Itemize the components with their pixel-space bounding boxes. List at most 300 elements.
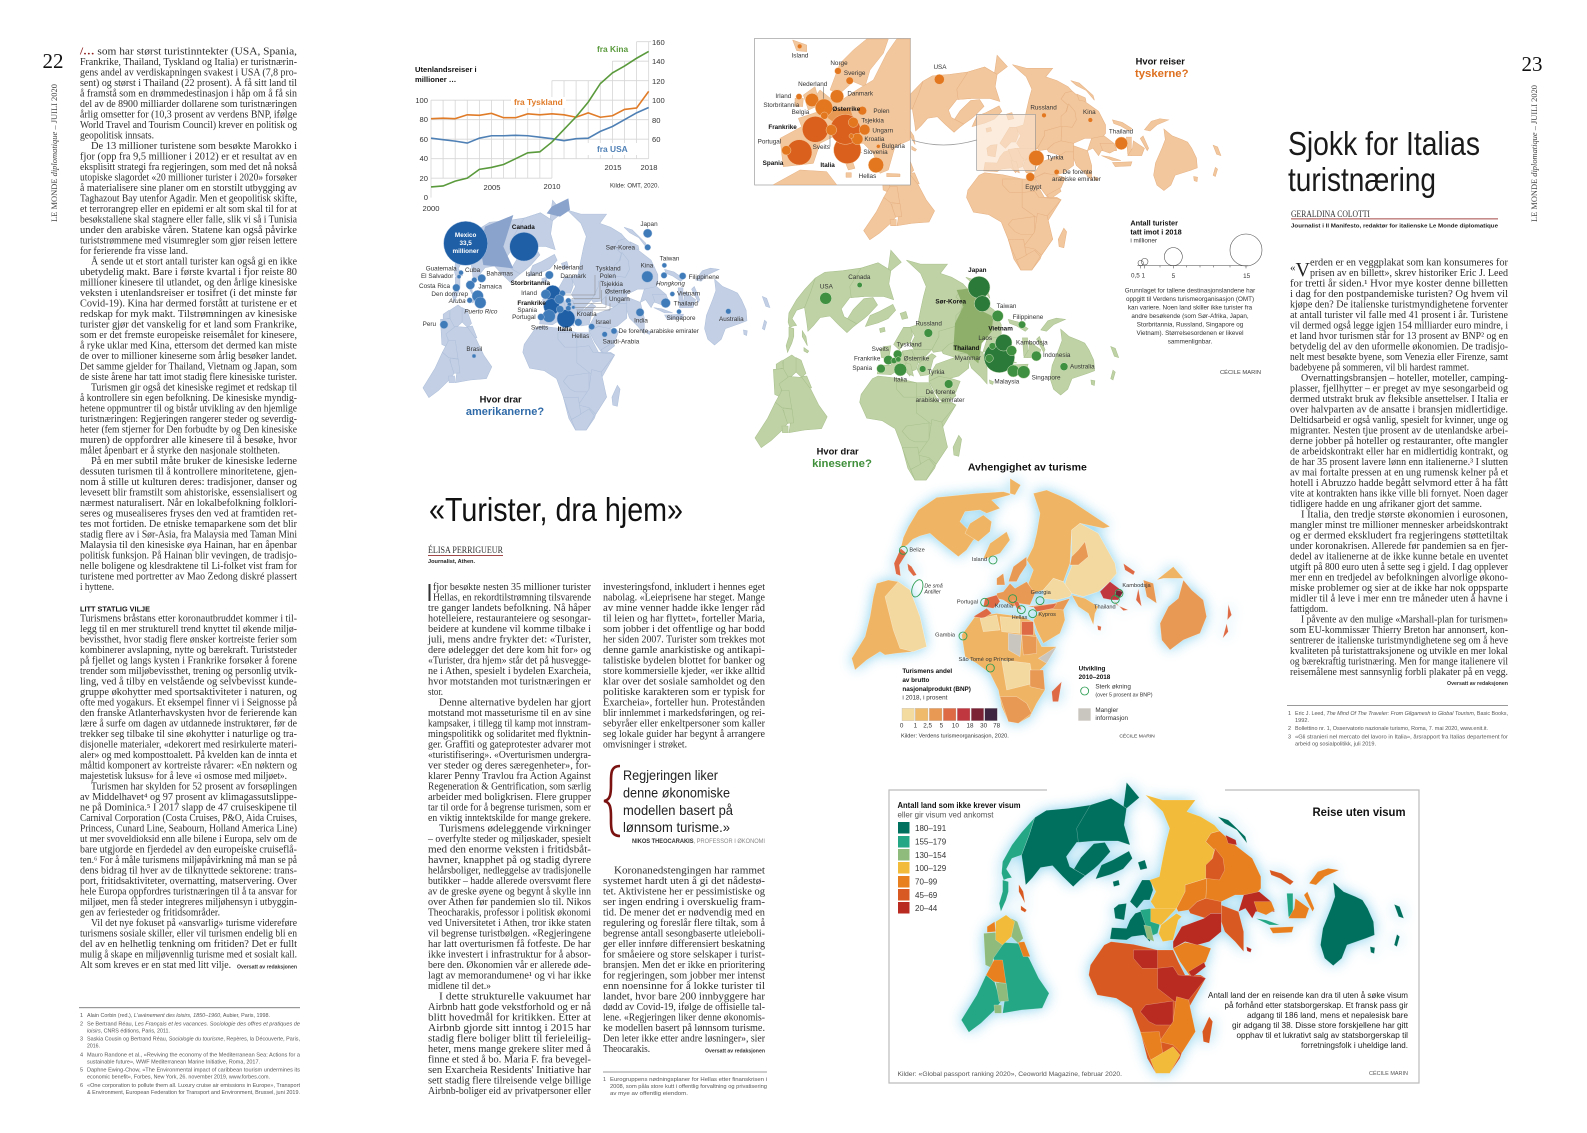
- axis labels: 160: [652, 38, 665, 47]
- quote text: modellen basert på: [623, 802, 733, 818]
- text column right: badebyene på sommeren, vil bli hardest rammet.: [1290, 362, 1469, 374]
- footnote middle: 1: [603, 1077, 606, 1083]
- text column 2: tar til orde for å begrense turismen, som er: [428, 802, 592, 814]
- connector curve: [912, 140, 977, 145]
- text column right: prisen av en billett», skrev historiker Eric J. Leed: [1310, 268, 1508, 279]
- country labels blue: Japan: [640, 221, 658, 228]
- text column 2: stor.: [428, 687, 443, 698]
- legend note: oppgitt til Verdens turismeorganisasjon (OMT): [1126, 296, 1254, 303]
- text column 1: main article continuation: utopiske slagordet «20 millioner turister i 2020» forsøker: [80, 172, 298, 184]
- country labels dependence: Kroatia: [995, 604, 1014, 610]
- legend visa: 20–44: [915, 904, 938, 913]
- country labels green: Canada: [848, 274, 871, 281]
- country labels orange: [758, 52, 1134, 191]
- series labels: fra USA: [597, 144, 628, 154]
- text column 2: – overfylte steder og miljøskader, spesielt: [427, 834, 591, 845]
- text column right: Overnattingsbransjen – hoteller, moteller, camping-: [1301, 373, 1508, 384]
- footnotes right: 3: [1288, 734, 1291, 740]
- text column 2: motstand mot masseturisme til en av sine: [428, 708, 592, 719]
- country labels blue: Singapore: [667, 315, 696, 322]
- legend visa: Antall land som ikke krever visum: [898, 801, 1020, 810]
- text column 1: main article continuation: å framstå som en drømmedestinasjon i håp om å få sin: [80, 88, 297, 100]
- legend title: [1130, 218, 1182, 244]
- text column 2: havner, knapphet på og stadig dyrere: [428, 855, 592, 866]
- text column 2: beidere at kundene vil komme tilbake i: [428, 624, 591, 635]
- country labels dependence: Gambia: [935, 633, 956, 639]
- country labels orange: Storbritannia: [763, 102, 800, 109]
- text column right: miske problemer og sier at de ikke har nok oppsparte: [1290, 583, 1509, 594]
- text column 1: section body: miljøet, men få steder integreres miljøhensyn i utbyggin-: [80, 897, 297, 908]
- byline Elisa Perrigueur: Journalist, Athen.: [428, 559, 475, 565]
- axis labels: Kilde: OMT, 2020.: [610, 182, 659, 190]
- text column 3 upper: omvisninger i strøket.: [603, 740, 687, 750]
- description visa: opphav til et lukrativt salg av statsborgerskap til: [1236, 1031, 1408, 1040]
- text column 1: section body: Alt som kreves er en stat med litt vilje.: [80, 960, 231, 971]
- text column 1: main article continuation: å kontrollere sin egen befolkning. De kinesiske myndig-: [80, 393, 297, 404]
- red brace: [604, 766, 620, 836]
- country labels blue: El Salvador: [421, 273, 453, 280]
- text column right: kjøpe den? De italienske turistmyndighetene forventer: [1290, 300, 1509, 310]
- text column 2: fjor besøkte nesten 35 millioner turister: [433, 582, 592, 593]
- country labels green: Frankrike: [854, 355, 881, 362]
- quote text: lønnsom turisme.»: [623, 819, 730, 835]
- chart title: Utenlandsreiser i: [415, 65, 477, 74]
- country labels blue: Spania: [517, 307, 538, 314]
- country labels green: Vietnam: [988, 325, 1013, 332]
- axis labels: 60: [652, 135, 660, 144]
- legend visa: [898, 801, 1020, 914]
- legend: development: 2010–2018: [1079, 674, 1111, 681]
- text column 3 lower: regulering og foreslår flere tiltak, som å: [603, 918, 766, 929]
- map: where Americans travel: [419, 198, 770, 430]
- axis labels: 2015: [605, 163, 621, 172]
- text column right: Deltidsarbeid er også vanlig, spesielt for kvinner, unge og: [1290, 415, 1508, 426]
- text column 1: section body: turismens sosiale skiller, eller vil turismen endelig bli en: [80, 928, 297, 940]
- country labels blue: Guatemala: [426, 265, 457, 272]
- text column 1: main article continuation: målet åpenbart er å styrke den nasjonale stoltheten.: [80, 446, 280, 456]
- text column 3 upper: her siden 2007. Turister som trekkes mot: [603, 634, 765, 646]
- text column 3 upper: til leien og har flyttet», forteller Maria,: [603, 614, 765, 624]
- footnotes left page: economic benefit», Forbes, New York, 26. november 2019, www.forbes.com.: [87, 1075, 270, 1081]
- heading orange map: Hvor reiser: [1136, 57, 1185, 67]
- text column right: derne jobber på hoteller og restauranter, ofte mangler: [1290, 436, 1509, 447]
- footnotes left page: 4: [80, 1052, 83, 1058]
- text column 2: av de greske øyene og begynt å skylle inn: [428, 886, 591, 898]
- line chart: foreign trips in millions: [415, 38, 665, 213]
- legend title: tatt imot i 2018: [1130, 227, 1182, 236]
- text column 1: main article continuation: heter (fem stjerner for Den forbudte by og Den kinesiske: [80, 424, 298, 436]
- country labels blue: Sveits: [531, 324, 548, 331]
- text column 1: section body: ne på Dominica.⁵ I 2017 slapp de 47 cruiseskipene til: [80, 802, 297, 814]
- text column right: hotell i Abruzzo hadde begått selvmord etter å ha fått: [1290, 478, 1508, 489]
- country labels orange: Belgia: [792, 109, 810, 116]
- text column 3 upper: som jobber i det offentlige og har bodd: [603, 624, 765, 635]
- text column right: I påvente av den mulige «Marshall-plan for turismen»: [1301, 614, 1508, 626]
- quote text: [623, 767, 733, 835]
- country labels green: Østerrike: [904, 355, 930, 362]
- country labels orange: Polen: [873, 108, 890, 115]
- text column 2: Turismens ødeleggende virkninger: [439, 824, 592, 834]
- country labels blue: Brasil: [466, 346, 482, 353]
- text column right: et land hvor turismen står for 13 prosent av BNP² og en: [1290, 331, 1508, 342]
- series labels: [514, 44, 629, 154]
- country labels green: arabiske emirater: [916, 397, 965, 404]
- text column 1: main article continuation: besøkstallene skal stagnere eller falle, slik vi så i Tunisia: [80, 214, 298, 226]
- text column 3 lower: for småeiere og store selskaper i turist-: [603, 950, 765, 960]
- axis labels: 0: [424, 193, 428, 202]
- text column 3 lower: ke modellen basert på lønnsom turisme.: [603, 1023, 765, 1034]
- text column 2: «turistifisering». «Overturismen undergra-: [428, 750, 591, 761]
- Mexico label: 33,5: [460, 240, 472, 247]
- text column 1: section body: den franske Atlanterhavskysten hvor de ferierende kan: [80, 708, 297, 719]
- quote text: Regjeringen liker: [623, 767, 718, 783]
- text column right: tidligere hadde en ung afrikaner gjort det samme.: [1290, 499, 1482, 510]
- text column 1: main article continuation: i hyttene.: [80, 582, 114, 593]
- text column 2: arbeider med boligkrisen. Flere grupper: [428, 792, 592, 803]
- legend note: [1125, 288, 1255, 346]
- inset Europe: [755, 38, 910, 185]
- text column 2: Regeneration & Gentrification, som særlig: [428, 782, 591, 792]
- text column 1: main article continuation: nærmest naturalisert. Når en lokalbefolkning folklori-: [80, 498, 297, 509]
- country labels orange: Spania: [763, 160, 784, 167]
- scale labels: 5: [1172, 273, 1176, 280]
- series labels: fra Kina: [597, 44, 629, 54]
- text column 1: section body: aler» og med komposttoalett. På kvelden kan de innta et: [80, 750, 297, 761]
- description visa: [1208, 991, 1409, 1050]
- visa world map: [961, 782, 1404, 1073]
- country labels orange: arabiske emirater: [1052, 176, 1101, 183]
- text column 1: main article continuation: /… som har størst turistinntekter (USA, Spania,: [79, 46, 297, 58]
- text column right: reisemålene mest sannsynlig forbli plakater på en vegg.: [1290, 667, 1508, 678]
- legend: development: informasjon: [1095, 715, 1129, 722]
- country labels blue: Israel: [595, 319, 611, 326]
- text column right: som EU-kommissær Thierry Breton har annonsert, kon-: [1290, 625, 1508, 636]
- text column 2: har latt overturismen få fotfeste. De har: [428, 939, 592, 950]
- proportional circles scale: [1137, 234, 1262, 268]
- country labels orange: Nederland: [798, 81, 828, 88]
- text column right: av mai fortalte pressen at en ung rumensk kelner på et: [1290, 468, 1508, 478]
- legend visa: 45–69: [915, 891, 938, 900]
- text column 1: main article continuation: [79, 46, 298, 593]
- text column 1: main article continuation: for ferierende fra visse land.: [80, 246, 188, 257]
- text column 1: main article continuation: et terrorangrep eller en epidemi er alt som skal til for at: [80, 204, 297, 215]
- text column 2: blitt hovedmål for kritikken. Etter at: [428, 1012, 591, 1024]
- legend note: Vietnam). Størrelsesordenen er likevel: [1137, 330, 1243, 337]
- pull quote: [604, 766, 765, 845]
- article title: Turister, dra hjem: «Turister, dra hjem»: [429, 491, 683, 528]
- axis labels: 140: [652, 57, 665, 66]
- country labels orange: Kina: [1083, 109, 1096, 116]
- country labels blue: Nederland: [554, 264, 583, 271]
- text column 2: med den enorme veksten i fritidsbåt-: [428, 844, 591, 856]
- scale labels: 0,5 1: [1131, 272, 1146, 279]
- text column 1: main article continuation: muren) de oppfordrer alle kinesere til å besøke, hvor: [80, 435, 298, 446]
- country labels blue: Danmark: [560, 273, 587, 280]
- text column 3 lower: [603, 866, 766, 1055]
- text column 2: ne i Athen, spesielt i bydelen Exarcheia,: [428, 666, 591, 677]
- footnote middle: 2008, som påla store kutt i offentlig forvaltning og privatisering: [610, 1083, 767, 1090]
- country labels orange: Kroatia: [864, 136, 885, 143]
- country labels orange: Tyrkia: [1047, 154, 1064, 161]
- map: where Germans travel: [755, 38, 1221, 270]
- legend visa: 180–191: [915, 824, 947, 833]
- text column 3 upper: politiske karakteren som er typisk for: [603, 687, 766, 698]
- text column 3 upper: store kommersielle kjeder, «er ikke alltid: [603, 666, 765, 677]
- country labels orange: Island: [792, 52, 809, 59]
- text column right: for tretti år siden.¹ Hvor mye koster denne billetten: [1290, 278, 1508, 290]
- text column right: midler til å leve i mer enn tre måneder uten å havne i: [1290, 594, 1508, 604]
- axis labels: 40: [420, 154, 428, 163]
- text column 1: main article continuation: de over to millioner kineserne som årlig besøker landet.: [80, 351, 297, 362]
- China highlighted: [953, 288, 993, 363]
- country labels green: Indonesia: [1043, 352, 1071, 359]
- text column 1: section body: kombinerer avslapning, nytte og bærekraft. Turiststeder: [80, 645, 298, 656]
- text column 1: main article continuation: turistnæringen: Regjeringen rangerer steder og severdig-: [80, 414, 297, 425]
- text column 1: section body: ofte med yogakurs. Et eksempel finner vi i Seignosse på: [80, 698, 298, 708]
- text column 1: main article continuation: nom å stille ut kulturen deres: tradisjoner, danser og: [80, 477, 297, 488]
- country labels orange: Slovenia: [863, 149, 888, 156]
- country labels orange: Tsjekkia: [861, 117, 884, 124]
- text column right: mer enn en tredjedel av befolkningen alvorlige økono-: [1290, 572, 1508, 584]
- axis labels: 2005: [484, 183, 500, 192]
- text column 1: section body: trender som miljøbevissthet, trening og personlig utvik-: [80, 666, 297, 677]
- country labels orange: Frankrike: [768, 124, 797, 131]
- heading green map: [812, 447, 872, 470]
- footnotes right: 1992.: [1295, 718, 1309, 724]
- text column right: migranter. Nesten tjue prosent av de utenlandske arbei-: [1290, 426, 1508, 436]
- country labels blue: Canada: [512, 224, 535, 231]
- footnotes right: Eric J. Leed, The Mind Of The Traveler: From Gilgamesh to Global Tourism, Basic Books,: [1295, 711, 1508, 717]
- country labels blue: Portugal: [512, 314, 536, 321]
- country labels dependence: Island: [972, 557, 987, 563]
- country labels orange: Egypt: [1025, 184, 1042, 191]
- text column 1: main article continuation: de siste årene har tatt imot stadig flere kinesiske turister.: [80, 372, 297, 383]
- footnotes left page: Mauro Randone et al., «Reviving the economy of the Mediterranean Sea: Actions for a: [87, 1052, 301, 1058]
- drop cap V: V: [1296, 259, 1310, 281]
- text column right: I Italia, den tredje største økonomien i eurosonen,: [1301, 510, 1508, 520]
- legend: share of GDP: 5: [940, 722, 944, 729]
- map content blue: [419, 198, 744, 418]
- country labels green: Italia: [894, 376, 908, 383]
- text column 1: main article continuation: seres og musealiseres fryses den ved at framtiden ret-: [80, 508, 297, 520]
- orange circles: [782, 44, 1128, 181]
- legend: share of GDP: 0: [900, 722, 904, 729]
- axis labels: 60: [420, 135, 428, 144]
- text column 2: butikker – hadde allerede oversvømt flere: [428, 876, 592, 887]
- country labels blue: De forente arabiske emirater: [619, 328, 699, 335]
- text column 3 upper: blir innlemmet i markedsføringen, og rei-: [603, 708, 765, 719]
- text column right: vil dermed også legge igjen 154 milliarder euro mindre, i: [1290, 320, 1508, 332]
- translator credit right: Oversatt av redaksjonen: [1447, 681, 1509, 687]
- Mexico label: Mexico: [455, 232, 477, 239]
- text column 1: section body: bevissthet, hvor stadig flere ønsker kortreiste ferier som: [80, 634, 297, 646]
- footnote middle: [603, 1072, 767, 1097]
- description visa: forretningsfolk i uheldige land.: [1301, 1041, 1408, 1050]
- country labels blue: Bahamas: [486, 270, 513, 277]
- country labels green: Filippinene: [1013, 314, 1044, 321]
- country labels dependence: Thailand: [1094, 604, 1116, 610]
- legend: development: Sterk økning: [1095, 683, 1131, 690]
- legend: share of GDP: 2,5: [923, 722, 933, 729]
- country labels orange: Ungarn: [872, 127, 894, 134]
- text column 1: section body: gruppe økohytter med sportsaktiviteter i naturen, og: [80, 687, 297, 698]
- text column 1: main article continuation: sent) og størst i Thailand (22 prosent). Å få sitt land til: [80, 77, 297, 89]
- legend: share of GDP: 30: [980, 722, 988, 729]
- highlight box over Europe: [977, 114, 1035, 170]
- label backgrounds: [511, 97, 566, 108]
- legend visa: eller gir visum ved ankomst: [898, 810, 994, 820]
- text column 2: sett stadig flere tilreisende velge billige: [428, 1076, 592, 1086]
- blue glow: [852, 478, 1232, 723]
- country labels blue: Costa Rica: [419, 283, 450, 290]
- country labels orange: Sveits: [813, 144, 830, 151]
- legend: development: Utvikling: [1079, 665, 1106, 672]
- map title: Avhengighet av turisme: [968, 462, 1087, 473]
- axis labels: 2000: [423, 204, 439, 213]
- country labels blue: Aruba: [448, 298, 466, 305]
- axis labels: 100: [652, 96, 665, 105]
- scale labels: [1131, 272, 1251, 280]
- country labels orange: Bulgaria: [882, 143, 905, 150]
- legend: number of tourists: [1130, 218, 1262, 280]
- country labels orange: Russland: [1030, 104, 1057, 111]
- text column 2: Airbnb hatt gode vekstforhold og er nå: [428, 1002, 592, 1013]
- text column 2: kampsaker, i tillegg til kamp mot innstram-: [428, 718, 591, 730]
- text column 3 upper: [603, 582, 766, 750]
- legend visa: 100–129: [915, 864, 947, 873]
- map: where Chinese travel: [755, 250, 1119, 480]
- country labels green: Myanmar: [955, 355, 981, 362]
- country labels blue: Ungarn: [609, 296, 630, 303]
- text column 2: I dette strukturelle vakuumet har: [439, 992, 592, 1002]
- text column 1: section body: på fjellet og langs kysten i Frankrike forsøker å forene: [80, 656, 298, 666]
- text column 2: hvor motstanden mot turistnæringen er: [428, 676, 592, 688]
- country labels blue: Peru: [423, 321, 436, 328]
- heading blue map: Hvor drar: [480, 394, 522, 404]
- legend: development: [1078, 665, 1153, 722]
- text column 1: main article continuation: å ryke uklar med Kina, ettersom det dermed kan miste: [80, 340, 298, 352]
- country labels dependence: Georgia: [1031, 590, 1052, 596]
- country labels dependence: Kambodsja: [1122, 583, 1151, 589]
- country labels green: Kambodsja: [1016, 339, 1048, 346]
- text column 3 upper: denne gamle anarkistiske og antikapi-: [603, 645, 765, 656]
- country labels blue: Filippinene: [689, 274, 720, 281]
- text column 3 lower: Koronanedstengingen har rammet: [614, 866, 765, 876]
- text column 1: main article continuation: under den arabiske våren. Statene kan også påvirke: [80, 225, 298, 236]
- legend: development: Mangler: [1095, 707, 1118, 714]
- footnotes right: 1: [1288, 711, 1291, 717]
- legend: share of GDP: 78: [993, 722, 1001, 729]
- map: dependence on tourism: [852, 462, 1232, 739]
- page number 23: 23: [1522, 52, 1542, 76]
- byline Elisa Perrigueur: ÉLISA PERRIGUEUR: [428, 545, 503, 555]
- text column 3 lower: tet. Aktivistene her er pessimistiske og: [603, 886, 765, 898]
- legend title: i millioner: [1130, 237, 1157, 244]
- text column 2: ger. Graffiti og gateprotester advarer mot: [428, 740, 591, 750]
- text column 2: tre ganger landets befolkning. Nå håper: [428, 603, 592, 614]
- country labels blue: Hongkong: [656, 280, 685, 287]
- text column 2: heter, mens mange grekere sliter med å: [428, 1044, 592, 1055]
- label background usa: [587, 143, 637, 155]
- country labels blue: Jamaica: [478, 283, 502, 290]
- country labels orange: Irland: [775, 93, 792, 100]
- translator credit left: Oversatt av redaksjonen: [237, 964, 298, 970]
- legend: share of GDP: i 2018, i prosent: [902, 694, 948, 701]
- series labels: fra Tyskland: [514, 97, 563, 107]
- country labels orange: Portugal: [758, 138, 781, 145]
- Mexico label: [452, 232, 479, 255]
- text column 1: main article continuation: årlig omsetter for (10,3 prosent av verdens BNP, ifølge: [80, 110, 298, 120]
- text column 2: Airbnb-boliger eid av privatpersoner eller: [428, 1086, 592, 1097]
- country labels green: Malaysia: [994, 378, 1020, 385]
- footnotes left page: 2: [80, 1021, 83, 1027]
- country labels orange: Østerrike: [832, 106, 861, 113]
- text column right: og bærekraftig turistnæring. Men for mange italienere vil: [1290, 656, 1508, 668]
- source and credit dependence: [901, 732, 1155, 739]
- legend note: Grunnlaget for tallene destinasjonslandene har: [1125, 288, 1255, 294]
- text column right: [1290, 258, 1509, 678]
- country labels blue: [419, 221, 744, 353]
- legend: share of GDP: 1: [914, 722, 918, 729]
- text column right: plasser, fjellhytter – er preget av mye sesongarbeid og: [1290, 384, 1508, 394]
- USA highlighted: [480, 198, 570, 268]
- text column 1: main article continuation: å materialisere sine planer om en storstilt utbygging av: [80, 183, 297, 194]
- text column 1: section body: dens bidrag til hver av de tilknyttede sektorene: trans-: [80, 866, 297, 876]
- description visa: adgang til 186 land, mens et nepalesisk bare: [1247, 1011, 1409, 1020]
- text column 2: lagt av memorandumene¹ og vi har ikke: [428, 970, 592, 982]
- text column right: vite at kontrakten hans ikke ville bli fornyet. Noen dager: [1290, 488, 1509, 500]
- heading orange map: [1135, 57, 1189, 80]
- text column 1: section body: majestetisk luksus» for å leve «i osmose med miljøet».: [80, 771, 287, 782]
- drop cap V: «: [1290, 262, 1296, 274]
- map content orange: [755, 38, 1189, 191]
- text column 1: main article continuation: geopolitisk innsats.: [80, 130, 154, 142]
- country labels green: Russland: [915, 320, 942, 327]
- text column 1: section body: lære å surfe om dagen av utdannede instruktører, før de: [80, 718, 298, 730]
- text column 1: section body: bare utgjorde en fjerdedel av den europeiske cruiseflå-: [80, 844, 297, 856]
- legend visa: 130–154: [915, 851, 947, 860]
- description visa: på forhånd etter statsborgerskap. Et fransk pass gir: [1224, 1001, 1408, 1010]
- text column 1: main article continuation: På en mer subtil måte bruker de kinesiske lederne: [91, 456, 298, 467]
- text column 1: main article continuation: millioner kinesere til utlandet, og den årlige kinesiske: [80, 278, 298, 288]
- text column 2: «Turister, dra hjem» står det på husvegge-: [428, 656, 591, 666]
- text column 1: section body: gen av feriesteder og fritidsområder.: [80, 908, 220, 918]
- text column 2: sen Exarcheia Residents' Initiative har: [428, 1065, 592, 1076]
- growth rings: [899, 546, 1123, 672]
- country labels blue: Australia: [719, 316, 744, 323]
- axis labels: [415, 38, 665, 213]
- text column 1: main article continuation: Å sende ut et stort antall turister kan også gi en ikke: [91, 256, 298, 268]
- colored countries: [961, 782, 1404, 1073]
- legend visa: 155–179: [915, 838, 947, 847]
- text column 1: main article continuation: politisk funksjon. På Hainan blir vevingen, de tradisjo-: [80, 550, 297, 562]
- text column right: dedel av italienerne at de ikke kunne betale en uventet: [1290, 552, 1508, 562]
- country labels blue: Den dom.rep: [431, 291, 468, 298]
- source and credit dependence: Kilder: Verdens turismeorganisasjon, 2020.: [901, 733, 1009, 739]
- text column 1: main article continuation: World Travel and Tourism Council) krever en politisk og: [80, 120, 297, 131]
- axis labels: 80: [420, 115, 428, 124]
- country labels orange: Thailand: [1109, 128, 1134, 135]
- footnotes left page: [79, 1007, 301, 1096]
- description visa: gir adgang til 38. Disse store forskjellene har gitt: [1232, 1021, 1409, 1030]
- country labels orange: De forente: [1063, 169, 1093, 176]
- text column 3 upper: talistiske bydelen blottet for banker og: [603, 656, 765, 666]
- text column 2: juli, mens andre frykter det: «Turister,: [427, 634, 591, 646]
- footnotes left page: 3: [80, 1037, 83, 1043]
- text column 3 upper: seg lokale guider har begynt å arrangere: [603, 729, 766, 740]
- country labels green: Thailand: [953, 345, 979, 352]
- frame: [889, 790, 1419, 1083]
